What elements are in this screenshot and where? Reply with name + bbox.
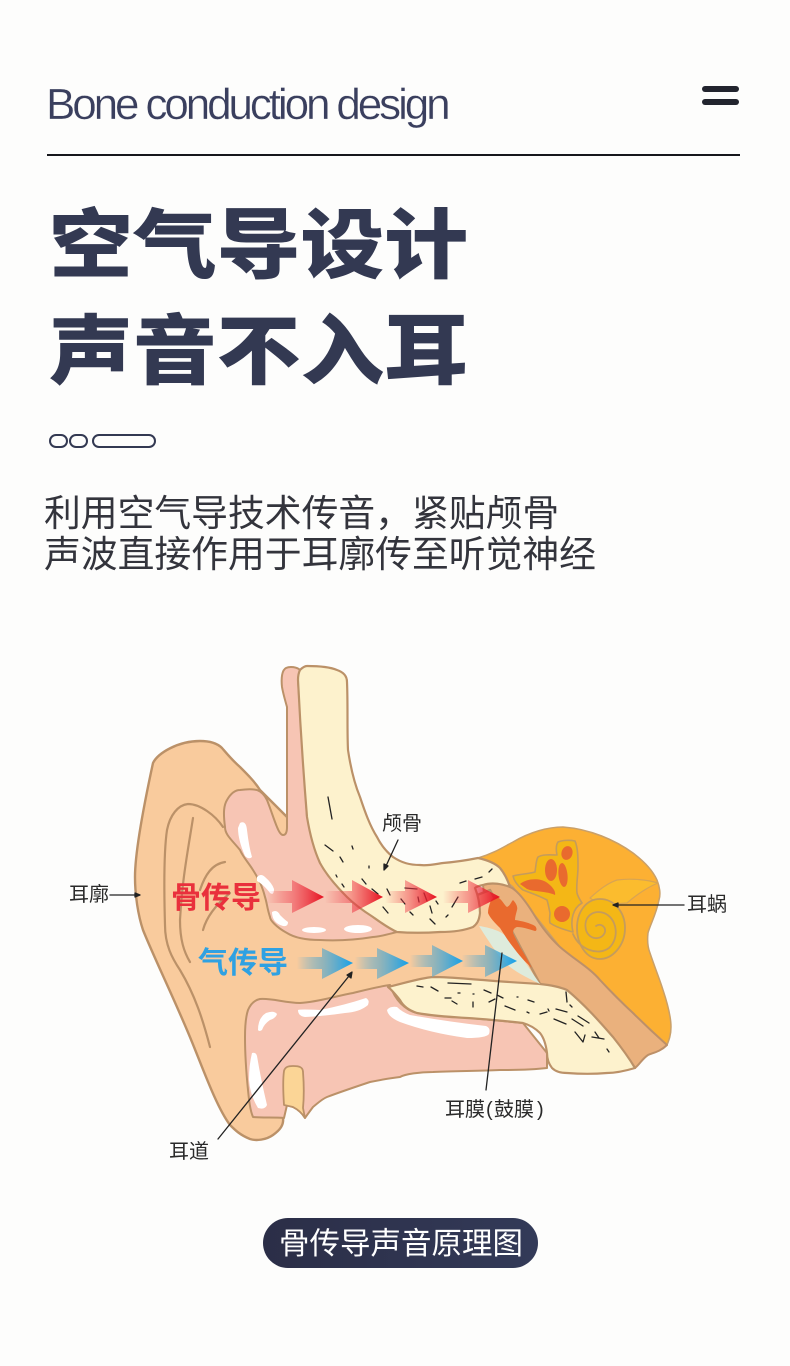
lower ear canal pink xyxy=(245,985,547,1118)
heading: Bone conduction design: Bone conduction design xyxy=(46,80,448,129)
label: cochlea: 耳蜗 xyxy=(687,893,727,916)
leader lines xyxy=(110,840,684,1139)
label: ear canal: 耳道 xyxy=(169,1140,209,1163)
ear anatomy diagram xyxy=(69,666,727,1163)
upper skull bone xyxy=(298,666,510,933)
description text: 声波直接作用于耳廓传至听觉神经 xyxy=(44,534,596,575)
decoration: pills xyxy=(50,435,155,447)
label: bone conduction: 骨传导 xyxy=(171,882,261,915)
bone texture dashes xyxy=(325,797,609,1052)
highlights xyxy=(238,822,490,1109)
caption pill: 骨传导声音原理图 xyxy=(279,1227,523,1261)
label: air conduction: 气传导 xyxy=(198,947,288,980)
ossicles xyxy=(488,897,536,968)
label: auricle: 耳廓 xyxy=(69,883,109,906)
description text: 利用空气导技术传音，紧贴颅骨 xyxy=(44,493,559,534)
label: eardrum: 鼓膜 xyxy=(494,1098,534,1121)
description text xyxy=(44,493,596,575)
eardrum xyxy=(479,926,540,984)
label: eardrum: 耳膜 xyxy=(445,1098,485,1121)
caption pill xyxy=(263,1218,538,1268)
cochlea xyxy=(573,879,658,959)
title: 空气导设计 xyxy=(49,202,468,288)
title: 声音不入耳 xyxy=(49,308,468,394)
label: eardrum: ) xyxy=(537,1099,544,1121)
label: eardrum: ( xyxy=(486,1099,493,1121)
icon: menu bars xyxy=(702,86,739,105)
vestibule and semicircular canals xyxy=(513,840,582,932)
label: skull: 颅骨 xyxy=(382,812,422,835)
inner ear sacs xyxy=(520,845,574,922)
title xyxy=(49,202,468,394)
lower skull bone xyxy=(388,977,635,1074)
red arrows: bone conduction xyxy=(267,880,500,913)
ear fold lines xyxy=(164,804,230,1047)
inner ear orange region xyxy=(478,827,671,1045)
blue arrows: air conduction xyxy=(297,945,517,979)
middle ear tan band xyxy=(483,883,667,1068)
outer ear xyxy=(135,741,540,1140)
tragus xyxy=(283,1066,305,1118)
upper ear canal pink xyxy=(224,667,397,940)
